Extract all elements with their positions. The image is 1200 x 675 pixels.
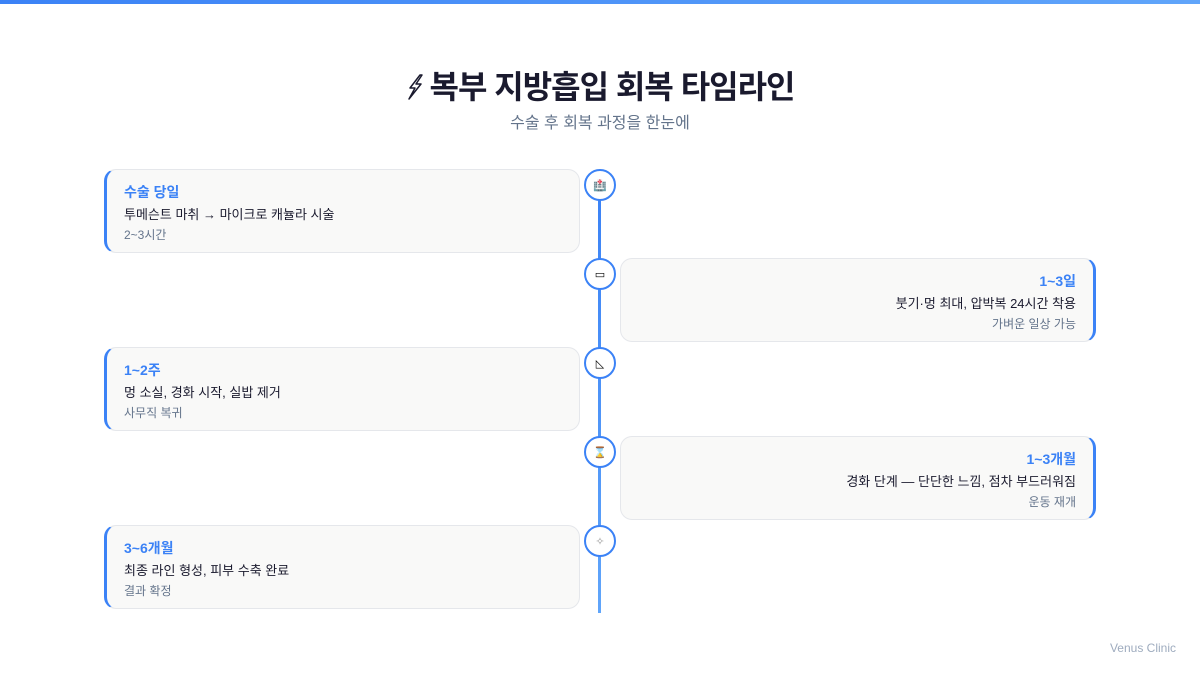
footer brand: Venus Clinic <box>1110 641 1176 655</box>
card: 수술 당일: 투메슨트 마취 → 마이크로 캐뉼라 시술 <box>124 207 334 222</box>
subtitle: 수술 후 회복 과정을 한눈에 <box>510 115 690 132</box>
card: 1~3일: 가벼운 일상 가능 <box>992 317 1076 331</box>
card: 수술 당일 <box>104 169 580 253</box>
icon: hourglass <box>584 436 616 468</box>
card: 1~2주: 멍 소실, 경화 시작, 실밥 제거 <box>124 385 281 400</box>
card: 3~6개월 <box>104 525 580 609</box>
icon: chart down: ◺ <box>596 356 604 370</box>
card: 1~2주 <box>104 347 580 431</box>
icon: sparkles: ✧ <box>595 534 605 548</box>
card: 1~3개월: 경화 단계 — 단단한 느낌, 점차 부드러워짐 <box>846 474 1076 489</box>
card: 1~3개월: 1~3개월 <box>1026 451 1076 467</box>
icon: hourglass: ⌛ <box>593 446 607 458</box>
card: 1~2주: 사무직 복귀 <box>124 406 183 420</box>
card: 수술 당일: 2~3시간 <box>124 228 166 242</box>
icon: bandage <box>584 258 616 290</box>
card: 1~3일 <box>620 258 1096 342</box>
icon: sparkles <box>584 525 616 557</box>
icon: hospital: 🏥 <box>593 178 607 192</box>
card: 1~3개월 <box>620 436 1096 520</box>
icon: chart down <box>584 347 616 379</box>
card: 3~6개월: 최종 라인 형성, 피부 수축 완료 <box>124 563 289 578</box>
timeline line <box>598 185 601 613</box>
card: 수술 당일: 수술 당일 <box>124 184 179 200</box>
card: 3~6개월: 3~6개월 <box>124 540 174 556</box>
card: 1~3개월: 운동 재개 <box>1028 495 1076 509</box>
card: 1~3일: 붓기·멍 최대, 압박복 24시간 착용 <box>896 296 1076 311</box>
card: 3~6개월: 결과 확정 <box>124 584 172 598</box>
card: 1~2주: 1~2주 <box>124 362 161 378</box>
icon: hospital <box>584 169 616 201</box>
title: 복부 지방흡입 회복 타임라인 <box>430 69 794 105</box>
card: 1~3일: 1~3일 <box>1039 273 1076 289</box>
icon: bandage: ▭ <box>595 268 605 280</box>
